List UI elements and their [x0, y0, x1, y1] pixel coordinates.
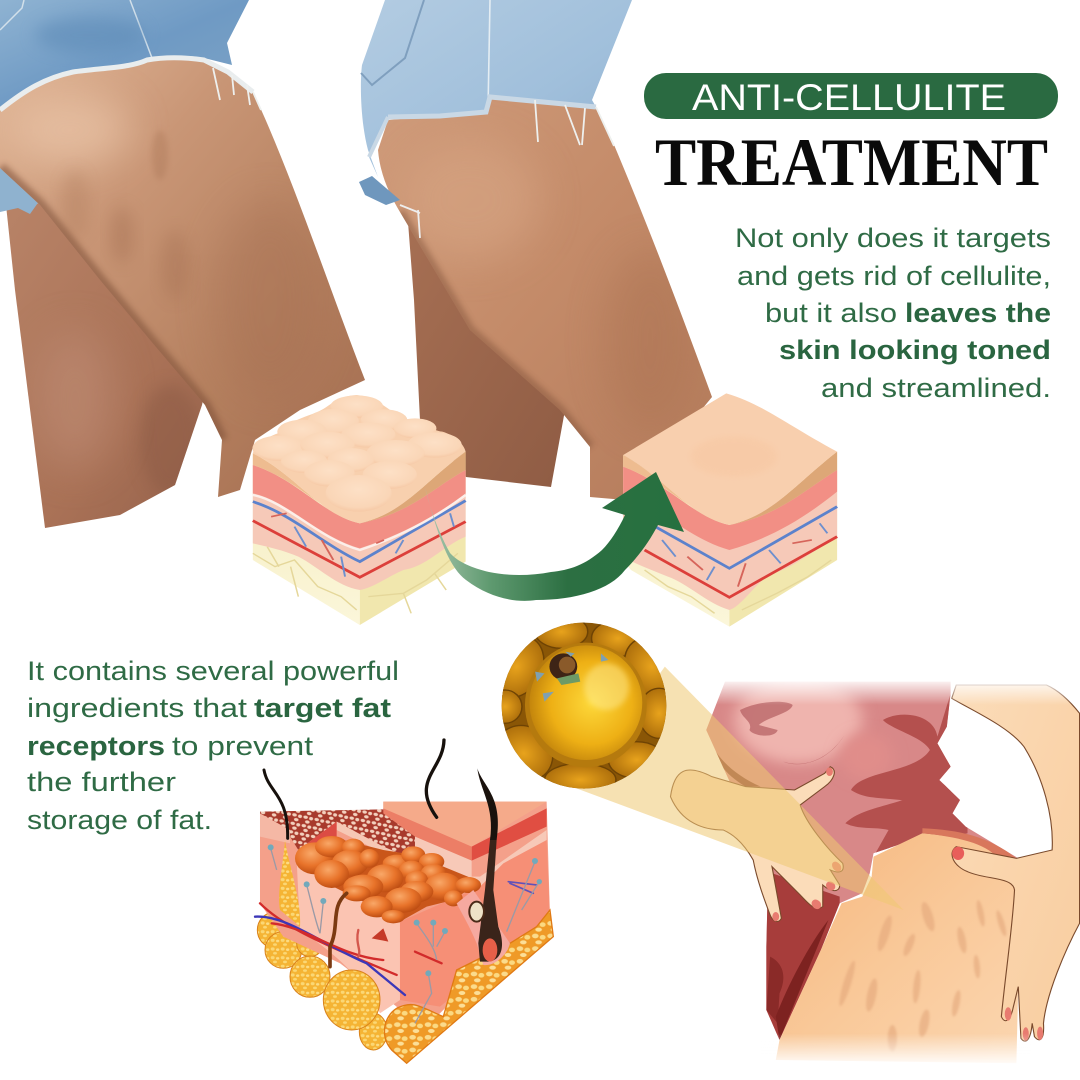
diagram: cube with cellulite	[252, 395, 466, 625]
text block: treatment benefits: leaves the	[905, 298, 1051, 328]
shorts: right flap	[359, 176, 400, 205]
text block: fat receptors: receptors	[27, 731, 165, 761]
text block: treatment benefits	[735, 223, 1051, 403]
belly	[776, 833, 1020, 1063]
shorts: right denim	[361, 0, 632, 177]
stretch marks	[837, 900, 1008, 1052]
diagram: cube with smooth skin	[623, 393, 837, 627]
red torso	[706, 682, 1018, 1040]
yellow fat globules left	[257, 913, 387, 1050]
fingernails	[772, 767, 1043, 1041]
large fat globule	[323, 970, 380, 1030]
wedge top	[383, 802, 547, 847]
text block: fat receptors: the further	[27, 767, 176, 797]
small vessel cut	[372, 928, 388, 942]
illustration: torso with stretch marks	[576, 667, 1080, 1067]
top cell layer	[260, 809, 415, 860]
sensory nerves	[271, 848, 539, 1023]
arm and right hand	[952, 685, 1080, 1041]
photo: legs after treatment	[359, 0, 712, 500]
pill heading: anti-cellulite: ANTI-CELLULITE	[692, 77, 1006, 118]
magnified fat cell	[502, 622, 666, 789]
text block: treatment benefits: skin looking toned	[779, 335, 1051, 365]
vessels	[255, 882, 537, 995]
magnifier beam	[576, 667, 904, 910]
orange fat spheres	[295, 836, 481, 923]
title: treatment: TREATMENT	[655, 124, 1048, 200]
hair strands	[264, 740, 444, 838]
yellow fat strip	[385, 910, 553, 1063]
shaded folds	[740, 702, 793, 736]
hair follicle right	[457, 768, 510, 965]
text block: treatment benefits: and streamlined.	[821, 373, 1051, 403]
text block: fat receptors: ingredients that	[27, 693, 248, 723]
shorts: left denim	[0, 0, 249, 110]
pill heading: anti-cellulite	[644, 73, 1058, 119]
photo: legs before treatment	[0, 0, 365, 528]
text block: treatment benefits: but it also	[765, 298, 897, 328]
yellow gland left	[279, 840, 300, 927]
shorts: left rear fringe	[0, 168, 40, 214]
diagram: skin cross-section	[255, 740, 553, 1063]
text block: fat receptors: It contains several powerful	[27, 656, 399, 686]
text block: fat receptors	[27, 656, 399, 835]
text block: treatment benefits: and gets rid of cellulite,	[737, 261, 1051, 291]
text block: fat receptors: target fat	[254, 693, 391, 723]
skin faces	[260, 802, 550, 1047]
text block: treatment benefits: Not only does it targets	[735, 223, 1051, 253]
text block: fat receptors: storage of fat.	[27, 805, 212, 835]
text block: fat receptors: to prevent	[172, 731, 314, 761]
edge fades	[701, 678, 1080, 705]
arrow: before to after	[425, 472, 684, 601]
left hand	[670, 767, 843, 922]
bumpy top skin	[253, 395, 466, 523]
